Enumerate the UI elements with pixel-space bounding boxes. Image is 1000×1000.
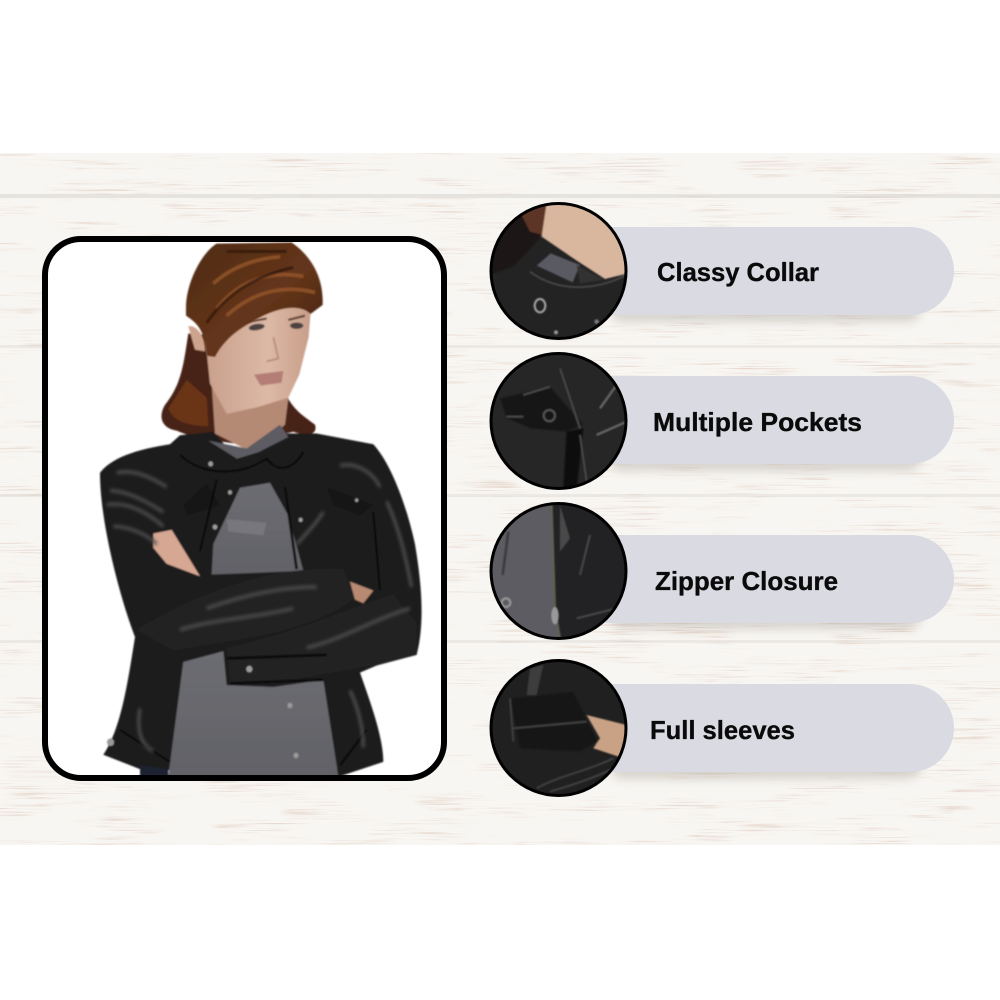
label: Classy Collar: Classy Collar bbox=[657, 257, 819, 287]
lower arm bbox=[228, 654, 416, 683]
pill: Multiple Pockets bbox=[600, 376, 954, 471]
upper shirt bbox=[212, 483, 303, 575]
icon: zipper detail bbox=[487, 502, 626, 642]
forearm bbox=[296, 570, 352, 596]
front hair bbox=[186, 242, 323, 357]
label: Zipper Closure: Zipper Closure bbox=[655, 566, 838, 596]
photo: woman in black leather jacket bbox=[100, 242, 422, 776]
label: Multiple Pockets: Multiple Pockets bbox=[653, 407, 862, 437]
pill: Classy Collar bbox=[600, 227, 954, 322]
jacket highlights bbox=[107, 465, 412, 751]
icon: pocket detail bbox=[491, 354, 627, 488]
back hair bbox=[161, 334, 316, 444]
pill: Zipper Closure bbox=[600, 535, 954, 629]
callout: Full sleeves bbox=[491, 660, 954, 796]
lower shirt bbox=[168, 651, 338, 776]
callout: Multiple Pockets bbox=[491, 354, 954, 488]
panel: jacket photo frame bbox=[45, 239, 444, 778]
callout: Classy Collar bbox=[490, 203, 954, 338]
collar shirt bbox=[208, 425, 288, 458]
icon: collar detail bbox=[490, 203, 628, 338]
background: white wood planks band bbox=[0, 153, 1000, 845]
label: Full sleeves: Full sleeves bbox=[650, 715, 795, 745]
icon: sleeve cuff detail bbox=[491, 660, 627, 796]
pill: Full sleeves bbox=[600, 684, 954, 779]
frame border bbox=[45, 239, 444, 778]
jacket body bbox=[100, 432, 422, 776]
callout: Zipper Closure bbox=[487, 502, 954, 642]
